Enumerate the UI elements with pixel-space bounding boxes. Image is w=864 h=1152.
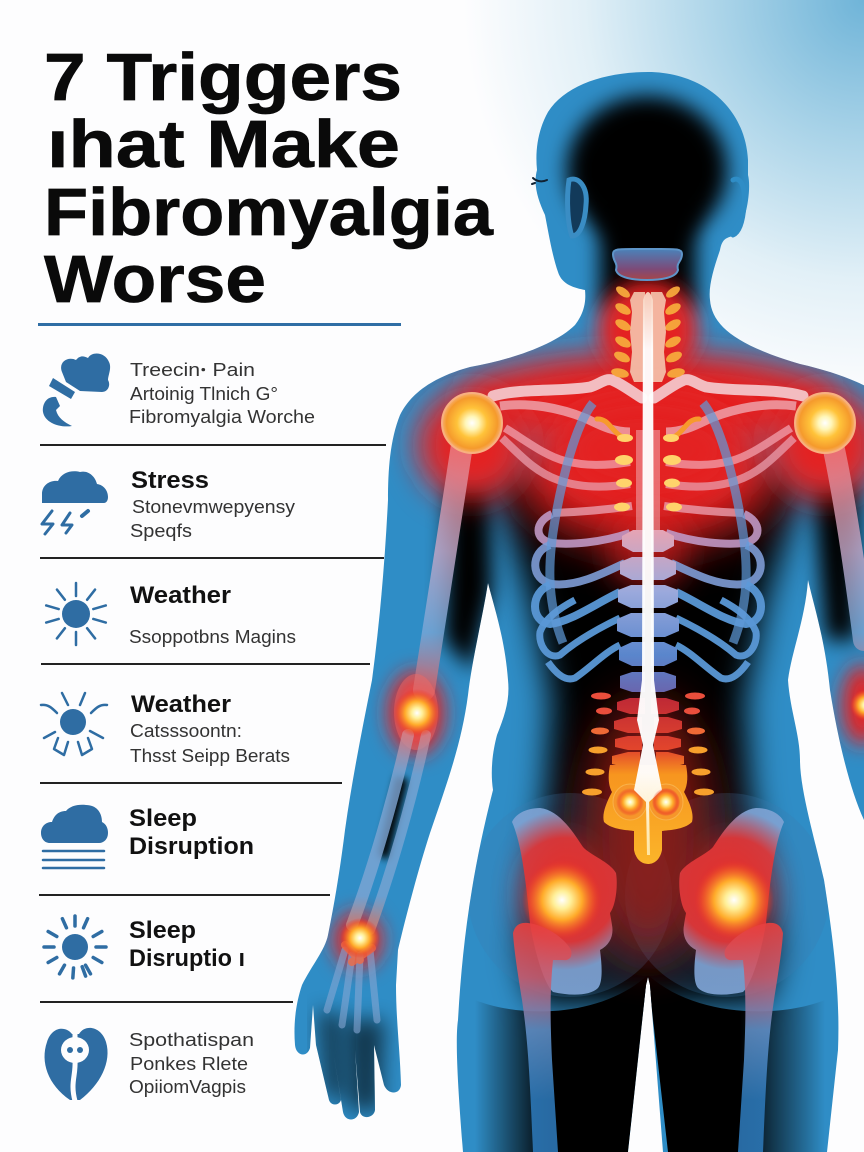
text: trigger 5 sleep disruption — [129, 805, 254, 860]
title: Worse — [44, 242, 266, 317]
right elbow pain point — [850, 689, 864, 721]
text: trigger 6 sleep disruption — [129, 917, 245, 972]
sacrum glow right — [652, 788, 680, 816]
icon: lungs emblem — [45, 1024, 108, 1101]
elbow pain point — [393, 689, 441, 737]
right arm bones — [833, 445, 864, 640]
text: trigger 7 — [129, 1030, 254, 1097]
icon: bold sun — [44, 916, 106, 978]
text: trigger 6 sleep disruption: Sleep — [129, 917, 196, 944]
spine — [634, 292, 662, 855]
icon: sun with hooked rays — [41, 693, 107, 755]
icon: cloud with fog lines — [41, 805, 108, 868]
eyelash — [532, 178, 547, 184]
text: trigger 1: Fibromyalgia Worche — [129, 407, 315, 427]
neck vertebra cap — [613, 249, 682, 280]
text: trigger 1: Treecinꞏ Pain — [130, 360, 255, 380]
text: trigger 1 — [129, 360, 315, 427]
title: Fibromyalgia — [44, 175, 494, 250]
shoulder joint left — [442, 393, 502, 453]
left arm bones — [327, 445, 462, 1030]
body silhouette with glow — [294, 72, 864, 1152]
wrist pain point — [340, 918, 380, 958]
text: trigger 2 stress: Stress — [131, 467, 209, 494]
text: trigger 6 sleep disruption: Disruptio ı — [129, 945, 245, 972]
shoulder joint right — [795, 393, 855, 453]
icon: storm cloud and crescent — [43, 353, 110, 426]
title — [44, 40, 494, 317]
title: ıhat Make — [47, 107, 400, 182]
text: trigger 4 weather — [130, 691, 290, 766]
ears — [568, 179, 744, 236]
text: trigger 4 weather: Catsssoontn: — [130, 721, 242, 741]
icon: sun — [46, 583, 106, 645]
text: trigger 1: Artoinig Tlnich G° — [130, 384, 278, 404]
text: trigger 4 weather: Weather — [131, 691, 231, 718]
text: trigger 2 stress: Speqfs — [130, 521, 192, 541]
icon: cloud with lightning — [42, 471, 108, 534]
text: trigger 5 sleep disruption: Sleep — [129, 805, 197, 832]
text: trigger 3 weather: Ssoppotbns Magins — [129, 627, 296, 647]
text: trigger 5 sleep disruption: Disruption — [129, 833, 254, 860]
text: trigger 2 stress — [130, 467, 295, 541]
text: trigger 7: Spothatispan — [129, 1030, 254, 1050]
text: trigger 7: OpiiomVagpis — [129, 1077, 246, 1097]
title rule — [38, 323, 401, 326]
skeleton right half — [648, 284, 803, 1152]
anatomical figure — [294, 72, 864, 1152]
skeleton left half — [493, 284, 648, 1152]
text: trigger 3 weather — [129, 582, 296, 647]
title: 7 Triggers — [44, 40, 402, 115]
text: trigger 7: Ponkes Rlete — [130, 1054, 248, 1074]
text: trigger 3 weather: Weather — [130, 582, 231, 609]
text: trigger 4 weather: Thsst Seipp Berats — [130, 746, 290, 766]
item dividers — [39, 444, 386, 1003]
text: trigger 2 stress: Stonevmwepyensy — [132, 497, 295, 517]
